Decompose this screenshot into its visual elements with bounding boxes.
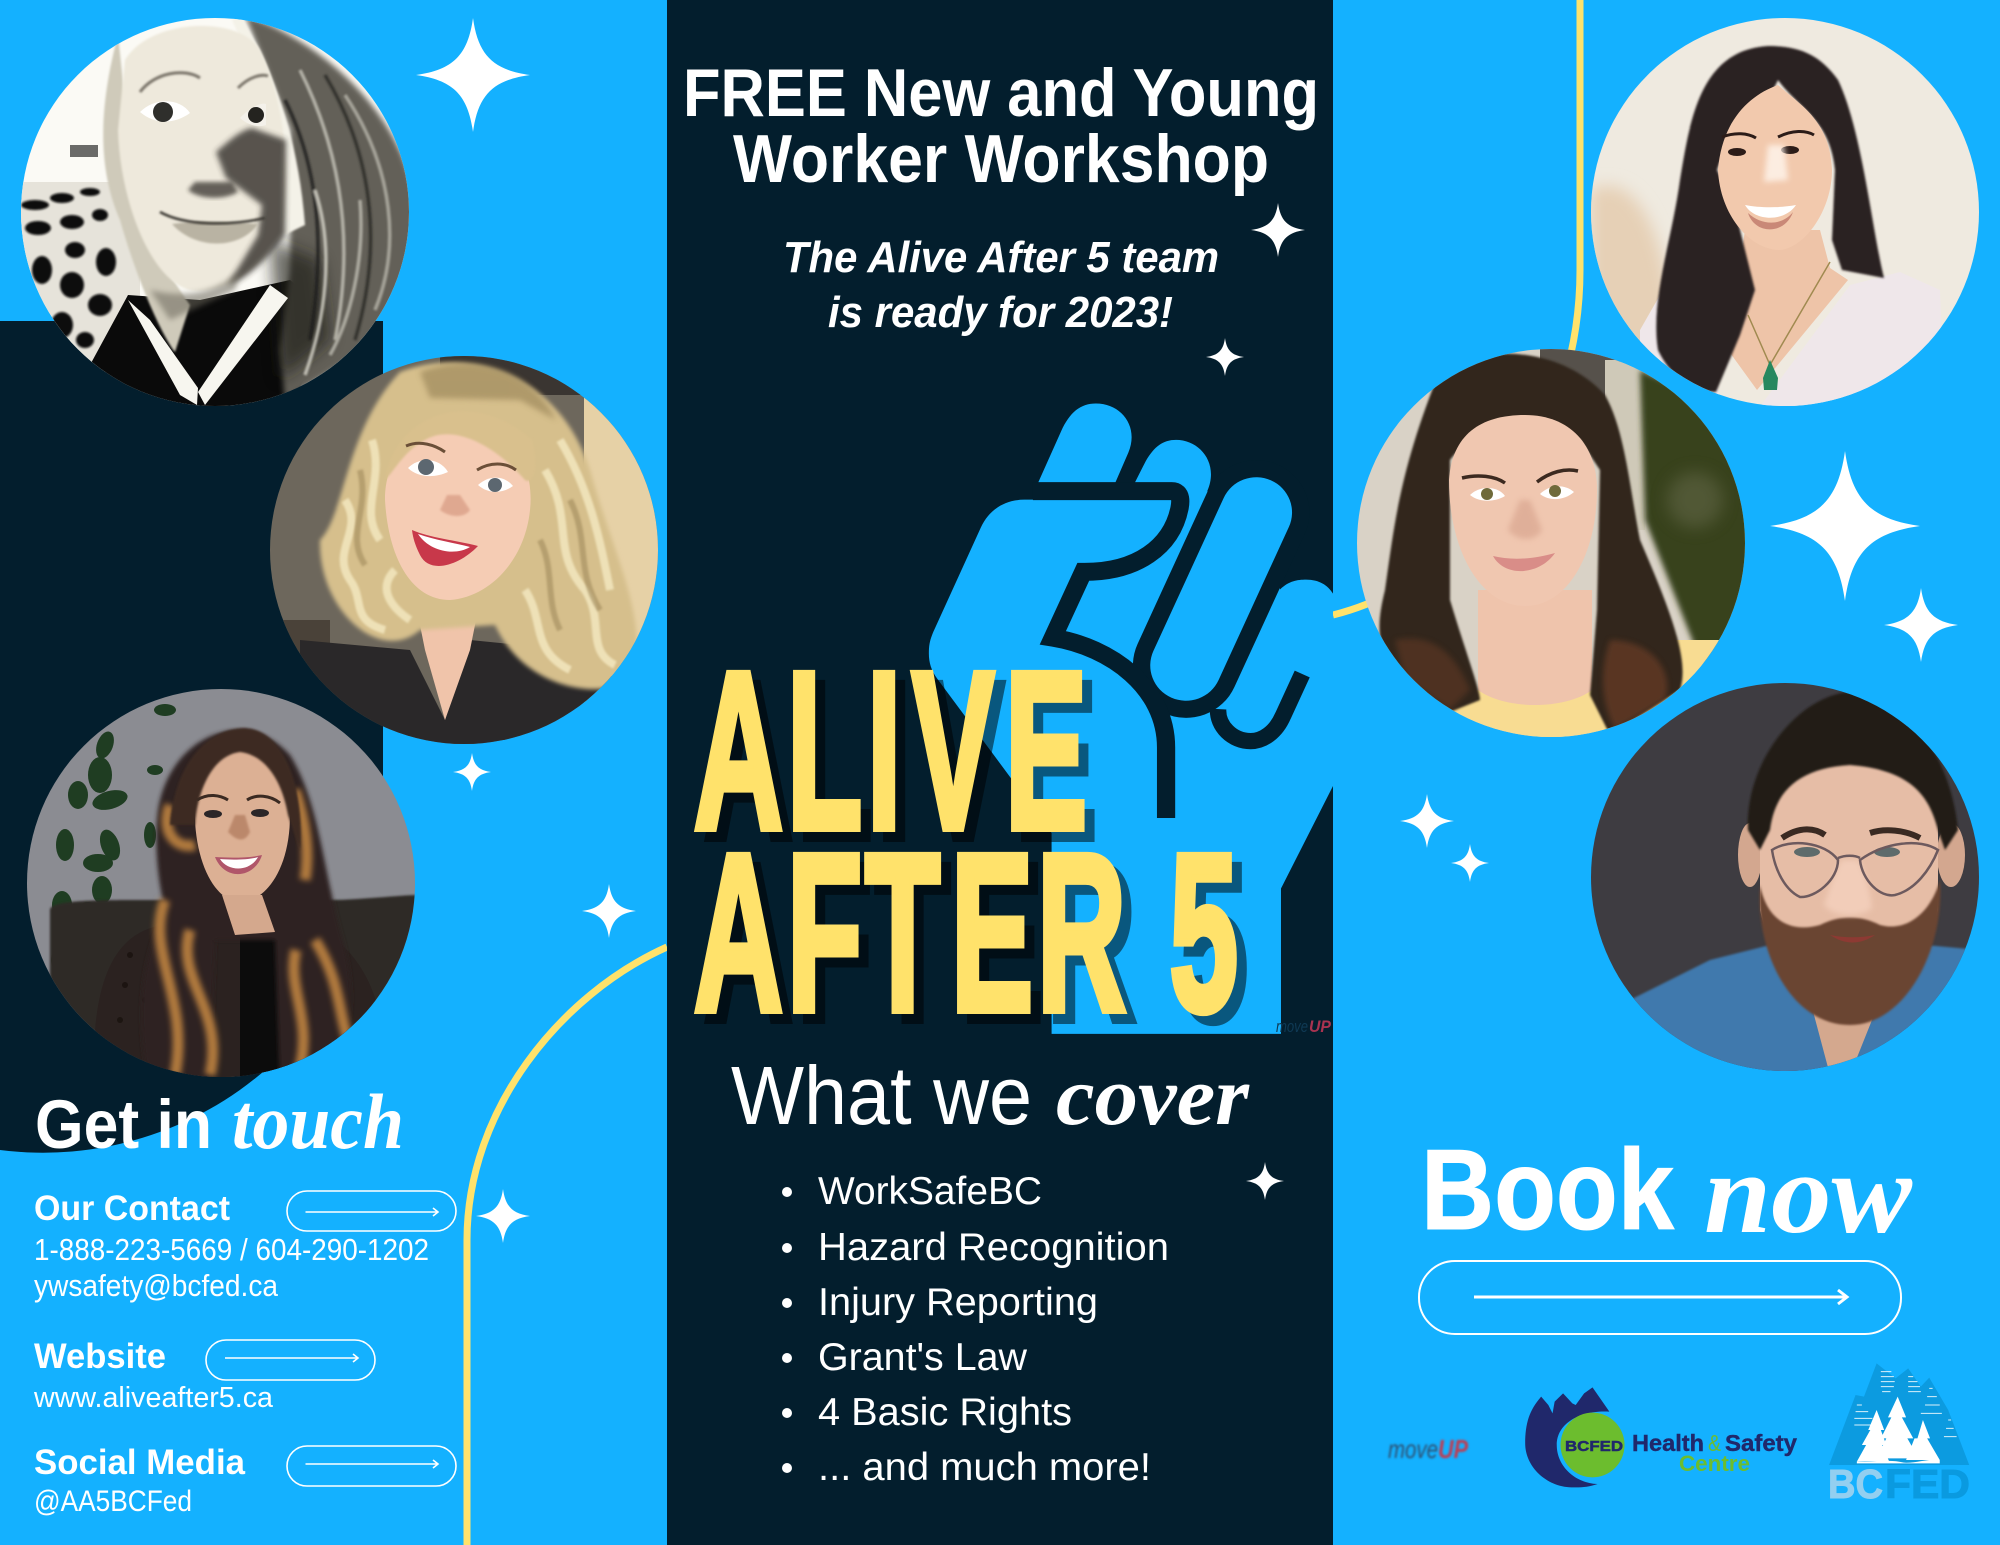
- logo: moveUP: move: [1388, 1434, 1438, 1464]
- yellow curve right: [1333, 0, 1580, 615]
- small moveUP mark on fist: move: [1276, 1017, 1308, 1036]
- bullet list: Injury Reporting: [818, 1281, 1098, 1324]
- arrow button: social media: [287, 1446, 456, 1486]
- heading: book now: now: [1704, 1130, 1913, 1258]
- logo: BCFED mountains: FED: [1885, 1461, 1970, 1507]
- portrait: woman on light wall: [1590, 15, 1985, 420]
- dark backing shape left: [0, 321, 383, 1153]
- contact block: our contact: ywsafety@bcfed.ca: [34, 1268, 279, 1303]
- bullet list: Grant's Law: [818, 1336, 1028, 1379]
- yellow curve left: [467, 947, 667, 1545]
- heading: what we cover: cover: [1056, 1050, 1250, 1143]
- subtitle: is ready for 2023!: [828, 288, 1173, 337]
- panel: centre: [667, 0, 1333, 1545]
- portrait: black and white woman: [20, 15, 420, 420]
- contact block: website: [33, 1337, 274, 1414]
- logo: BCFED Health and Safety Centre: Safety: [1725, 1430, 1797, 1456]
- title: FREE New and Young: [683, 55, 1319, 131]
- bullet list: 4 Basic Rights: [818, 1391, 1072, 1434]
- bullet list: ... and much more!: [818, 1446, 1151, 1489]
- logo title: ALIVE AFTER 5: AFTER 5: [694, 808, 1238, 1058]
- heading: get in touch: [35, 1078, 404, 1165]
- icon: raised fist: [929, 404, 1333, 1034]
- arrow button: contact: [287, 1191, 456, 1231]
- contact block: our contact: Our Contact: [34, 1189, 230, 1228]
- contact block: our contact: [34, 1189, 429, 1303]
- bullet list: Hazard Recognition: [818, 1226, 1169, 1269]
- heading: get in touch: Get in: [35, 1086, 212, 1163]
- subtitle: [783, 233, 1219, 337]
- heading: book now: [1421, 1127, 1913, 1258]
- logo: BCFED Health and Safety Centre: [1525, 1387, 1797, 1487]
- logo title: ALIVE AFTER 5: ALIVE: [694, 626, 1087, 876]
- logo title: ALIVE AFTER 5: AFTER 5: [704, 818, 1248, 1068]
- portrait: woman with long hair and plants: [25, 685, 420, 1090]
- sparkle stars: [416, 18, 1958, 1243]
- heading: book now: Book: [1421, 1127, 1675, 1254]
- portrait: bearded man with glasses: [1590, 680, 1985, 1080]
- contact block: website: Website: [34, 1337, 166, 1376]
- contact block: our contact: 1-888-223-5669 / 604-290-1202: [34, 1232, 429, 1267]
- logo title: ALIVE AFTER 5: ALIVE: [704, 636, 1097, 886]
- arrow button: website: [206, 1340, 375, 1380]
- small moveUP mark on fist: UP: [1309, 1017, 1332, 1036]
- logo: moveUP: UP: [1438, 1434, 1469, 1464]
- title: [683, 55, 1319, 197]
- logo: BCFED Health and Safety Centre: &: [1708, 1430, 1721, 1456]
- subtitle: The Alive After 5 team: [783, 233, 1219, 282]
- heading: what we cover: What we: [731, 1049, 1032, 1142]
- contact block: website: www.aliveafter5.ca: [33, 1382, 274, 1414]
- logo: BCFED mountains: [1828, 1363, 1970, 1507]
- portrait: blonde woman: [270, 350, 664, 760]
- title: Worker Workshop: [733, 121, 1269, 197]
- contact block: social media: @AA5BCFed: [34, 1485, 192, 1518]
- heading: what we cover: [731, 1049, 1250, 1143]
- logo: BCFED mountains: BC: [1828, 1461, 1883, 1507]
- contact block: social media: [34, 1443, 246, 1518]
- bullet list: WorkSafeBC: [818, 1170, 1042, 1213]
- heading: get in touch: touch: [232, 1078, 404, 1165]
- arrow button: book now: [1419, 1261, 1901, 1334]
- logo: BCFED Health and Safety Centre: BCFED: [1565, 1438, 1623, 1455]
- portrait: woman with braided dark hair: [1355, 345, 1760, 745]
- logo: BCFED Health and Safety Centre: Centre: [1679, 1451, 1750, 1476]
- bullet list: [782, 1170, 1169, 1489]
- logo title: ALIVE AFTER 5: [694, 626, 1248, 1068]
- contact block: social media: Social Media: [34, 1443, 246, 1482]
- logo: BCFED Health and Safety Centre: Health: [1632, 1430, 1704, 1456]
